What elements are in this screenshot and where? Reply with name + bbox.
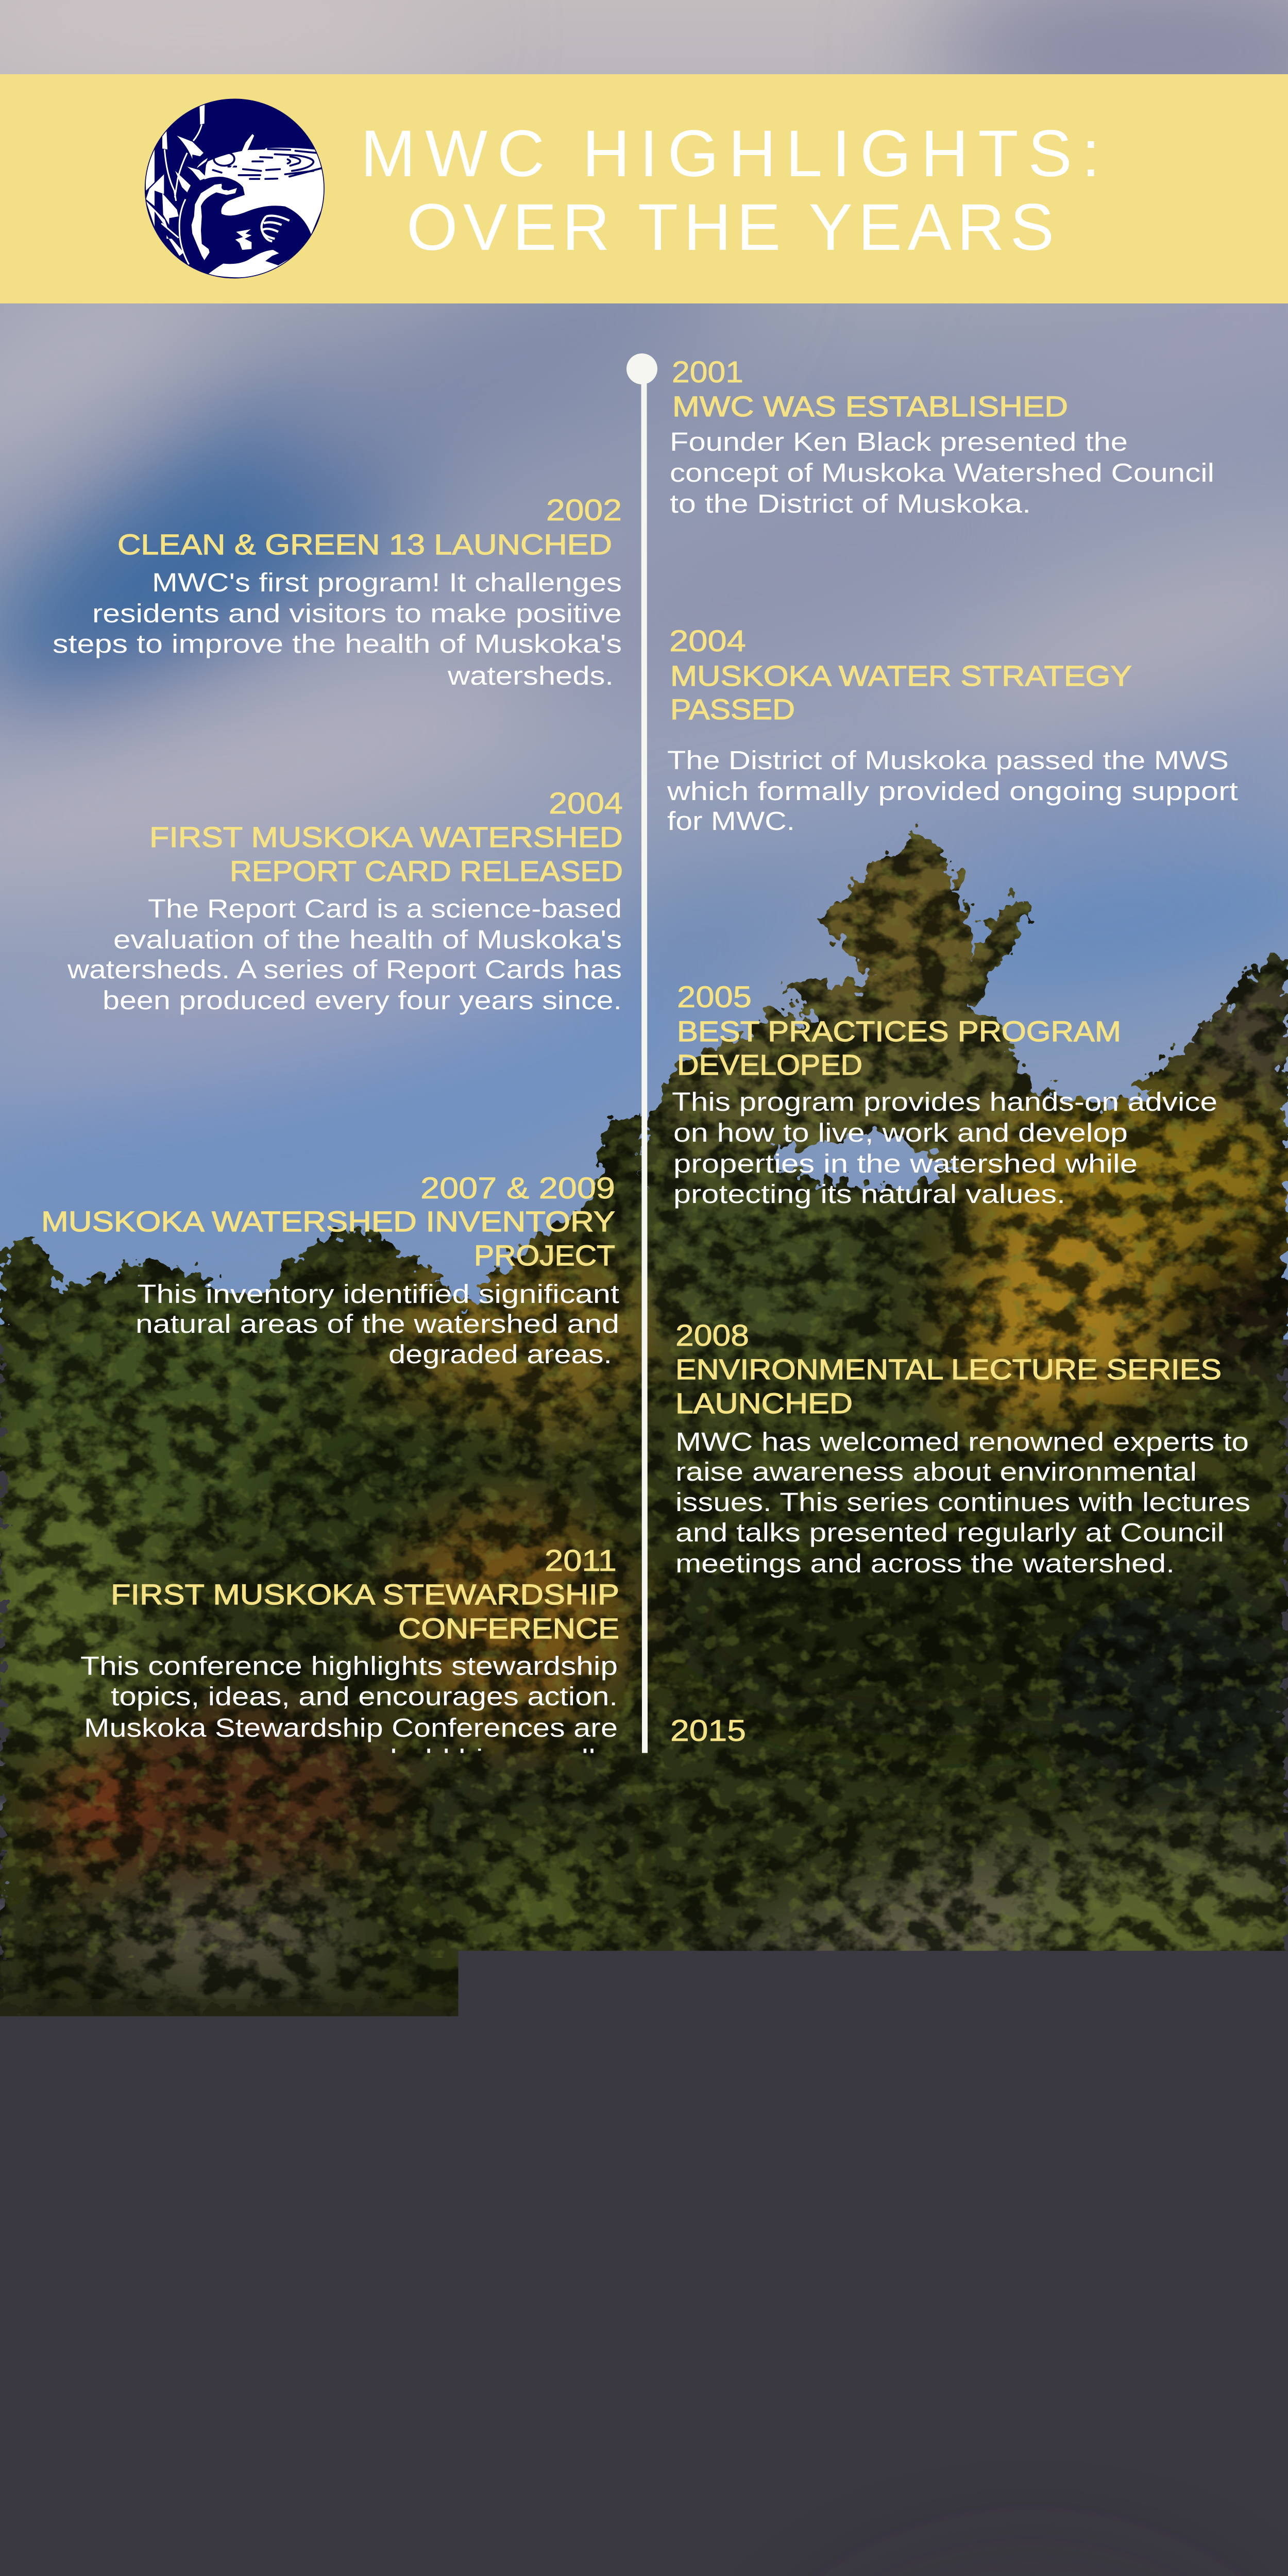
entry: 2011 Stewardship Conference [80,1544,619,1773]
description: This publication guides residents on how [669,1824,1234,1854]
heading [149,821,623,887]
heading [677,2108,1230,2174]
header banner [0,74,1288,303]
description: career-ready individuals. [271,2431,609,2461]
heading: LIVING IN COTTAGE COUNTRY [670,1748,1156,1781]
description: The District of Muskoka passed the MWS [667,745,1229,775]
title: OVER THE YEARS [406,191,1054,264]
description: assist with program delivery and [155,2370,602,2399]
description: concept of Muskoka Watershed Council [670,458,1214,487]
description: evaluation of the health of Muskoka's [113,925,622,954]
description: In memory of Rob Allen, Muskoka native [673,2521,1228,2551]
timeline spine [626,353,659,2576]
description: on how to live, work and develop [673,1118,1128,1147]
heading: CLEAN & GREEN 13 LAUNCHED [117,528,612,561]
entry: 2002 Clean and Green 13 [53,494,622,690]
heading [670,1748,1156,1815]
description: This conference highlights stewardship [80,1651,618,1681]
heading: PASSED [670,693,795,725]
entry: 2018 Robert Allen award [673,2413,1241,2576]
entry: 2007 and 2009 Inventory [41,1172,619,1369]
year: 2001 [672,355,743,389]
description: MWC's first program! It challenges [152,568,622,597]
logo: otter in reeds [145,99,330,278]
entry: 2001 MWC was established [670,355,1214,518]
description: quality protection. [677,2305,927,2334]
title [361,117,1100,264]
entry: 2004 Report Card [67,787,623,1015]
heading: LAUNCHED [675,1387,853,1419]
description: Interns have since been hired annually to [43,2340,609,2369]
year: 2008 [675,1319,749,1352]
description: The Report Card is a science-based [148,894,622,923]
description: to keep their property and way of living [669,1855,1212,1884]
heading: CONFERENCE [398,1612,619,1645]
description: which formally provided ongoing support [667,776,1238,806]
heading: REPORT CARD RELEASED [230,855,623,887]
description: properties in the watershed while [673,1149,1138,1178]
heading: MWC SERVED AS DISTRICT'S [677,2108,1139,2141]
year: 2004 [669,624,746,658]
heading: BEST PRACTICES PROGRAM [677,1015,1121,1047]
description [672,1087,1217,1209]
description [135,1279,619,1369]
description: raise awareness about environmental [675,1457,1197,1486]
heading [677,1015,1121,1081]
description [667,745,1238,836]
description [53,568,622,690]
description: century, and recommends actions to [107,2063,612,2093]
year: 2016 [538,1895,612,1928]
heading: ROBERT ALLEN MEMORIAL [675,2448,1093,2480]
description: residents and visitors to make positive [92,599,622,628]
year: 2004 [549,787,623,820]
description: watersheds. A series of Report Cards has [67,955,622,984]
description: steps to improve the health of Muskoka's [53,629,622,658]
description: Muskoka is likely to experience at mid- [80,2032,612,2062]
description: ameliorate the impacts of climate change. [35,2094,612,2123]
description: Official Plan, which includes a local focus [677,2243,1236,2273]
heading: STEWARDSHIP AWARD INITIATED [675,2481,1208,2514]
description: MWC has welcomed renowned experts to [675,1427,1249,1456]
heading: FIRST MWC INTERN HIRED [193,2304,612,2336]
entry: 2017 First intern [43,2268,612,2461]
description [80,1651,618,1773]
description [675,1427,1250,1578]
year: 2005 [677,980,752,1014]
heading [111,1578,619,1645]
description: topics, ideas, and encourages action. [111,1682,618,1711]
year: 2018 [675,2413,749,2447]
description [43,2340,609,2461]
heading: PLANNING FOR CLIMATE CHANGE [64,1929,612,1961]
entry: 2004 Muskoka Water Strategy [667,624,1238,836]
description: meetings and across the watershed. [675,1549,1175,1578]
description [669,1824,1251,1945]
description: environmentally friendly while [669,1885,1087,1914]
entry: 2005 Best Practices [672,980,1217,1209]
description: held bi-annually. [390,1744,618,1773]
heading: IN MUSKOKA PUBLISHED [212,1963,612,1996]
heading: MWC WAS ESTABLISHED [672,390,1068,422]
description: to the District of Muskoka. [670,489,1031,518]
heading: HANDBOOK PUBLISHED [670,1782,1052,1815]
description: communications, which in turn prepares [54,2401,609,2430]
year: 2015 [670,1714,746,1748]
description: watersheds. [447,661,614,690]
description: natural areas of the watershed and [135,1309,619,1338]
description: on climate, sustainability and water [677,2274,1164,2303]
heading: ENVIRONMENTAL LECTURE SERIES [675,1353,1222,1385]
heading: MUSKOKA WATER STRATEGY [670,659,1132,692]
description: This report investigates the climate that [67,2002,612,2031]
entry: 2008 Lecture Series [675,1319,1250,1578]
description: protecting its natural values. [673,1179,1065,1209]
description [35,2002,612,2123]
heading: MUSKOKA WATERSHED INVENTORY [41,1205,615,1238]
description [673,2521,1241,2576]
entry: 2016 Planning for Climate Change [35,1895,612,2123]
description: This program provides hands-on advice [672,1087,1217,1116]
description: degraded areas. [388,1340,612,1369]
heading: FIRST MUSKOKA STEWARDSHIP [111,1578,619,1611]
heading [675,1353,1222,1419]
description [67,894,622,1015]
heading: PROJECT [474,1239,615,1272]
heading: DEVELOPED [677,1048,862,1081]
description: understanding local rules and regulations. [669,1916,1251,1945]
heading [41,1205,615,1272]
heading: PLANNING ADVISORY COMMITTEE [677,2142,1230,2174]
heading [675,2448,1208,2514]
entry: 2015 Cottage Country handbook [669,1714,1251,1945]
year: 2017 [677,2074,752,2107]
description: This inventory identified significant [137,1279,619,1309]
description [677,2182,1236,2334]
description: issues. This series continues with lectures [675,1487,1250,1517]
title: MWC HIGHLIGHTS: [361,117,1100,191]
year: 2002 [546,494,622,527]
description: for MWC. [667,806,795,836]
entry: 2017 District Planning Advisory Committee [677,2074,1236,2334]
heading [64,1929,612,1996]
year: 2007 & 2009 [420,1172,615,1205]
description: Founder Ken Black presented the [670,427,1128,456]
description: Muskoka Stewardship Conferences are [84,1713,618,1742]
description: and talks presented regularly at Council [675,1518,1224,1547]
heading: FIRST MUSKOKA WATERSHED [149,821,623,853]
year: 2011 [545,1544,617,1578]
description: been produced every four years since. [103,986,622,1015]
description: input to shape the District of Muskoka's [677,2213,1224,2242]
heading [670,659,1132,725]
description [670,427,1214,518]
year: 2017 [538,2268,612,2302]
description: MWC provided significant community [677,2182,1192,2211]
